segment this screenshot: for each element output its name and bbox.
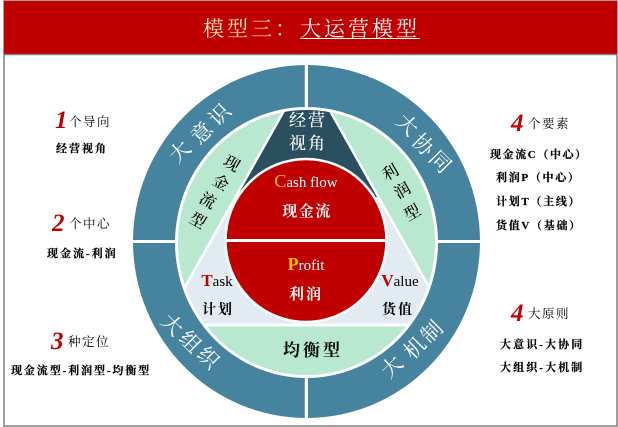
note detail: 现金流型-利润型-均衡型 (11, 363, 151, 377)
label: Profit: Profit (288, 254, 325, 274)
ring label: 大协同 (391, 109, 456, 178)
note: 2个中心: 2 (51, 210, 64, 237)
note detail: 现金流-利润 (47, 246, 118, 260)
label: 利润: 利润 (289, 285, 323, 303)
title: 模型三： (203, 17, 299, 41)
ring label: 大意识 (164, 98, 237, 168)
label: 均衡型: 均衡型 (283, 341, 343, 360)
center circle (225, 159, 387, 322)
ring label: 大组织 (156, 309, 225, 375)
label: Cash flow: Cash flow (274, 171, 338, 191)
label: 经营: 经营 (289, 111, 327, 130)
ring label: 大机制: 制 (416, 316, 448, 348)
label: 现金流型: 现 (220, 152, 243, 176)
element list: 利润P（中心） (496, 170, 581, 184)
label: 利润型: 润 (391, 179, 414, 203)
principle list (500, 337, 584, 374)
title banner (4, 1, 617, 54)
note: 4个要素: 4 (510, 110, 524, 137)
label: Task: Task (201, 271, 233, 290)
top dark segment (238, 110, 377, 197)
ring label: 大组织: 组 (174, 326, 206, 358)
note: 3种定位 (11, 328, 151, 377)
note: 4个要素: 个要素 (528, 116, 570, 131)
triangle lower zone (186, 197, 428, 324)
ring label: 大机制: 大 (376, 351, 408, 383)
element list: 货值V（基础） (496, 218, 582, 232)
note detail: 经营视角 (56, 141, 108, 155)
label: 现金流: 现金流 (282, 202, 332, 220)
note: 4大原则 (500, 300, 584, 374)
note: 4个要素 (490, 110, 588, 232)
label: 现金流型: 流 (196, 189, 219, 213)
label: 计划: 计划 (202, 301, 234, 318)
label: 货值: 货值 (382, 301, 414, 318)
ring label: 大意识: 意 (186, 117, 218, 149)
ring label: 大协同: 协 (407, 129, 440, 162)
element list: 现金流C（中心） (490, 147, 588, 161)
note: 3种定位: 种定位 (68, 335, 110, 349)
ring label: 大组织: 织 (192, 342, 225, 375)
ring label: 大机制 (376, 316, 448, 383)
label: 视角: 视角 (289, 134, 327, 153)
note: 3种定位: 3 (50, 328, 64, 355)
label: 现金流型 (186, 152, 243, 233)
title underlined part: 大运营模型 (300, 17, 420, 41)
label: 利润型 (379, 161, 424, 225)
note: 4大原则: 大原则 (528, 306, 570, 321)
note: 2个中心: 个中心 (69, 216, 111, 231)
element list (490, 147, 588, 232)
label: 利润型: 型 (401, 201, 424, 225)
element list: 计划T（主线） (496, 194, 581, 208)
ring label: 大组织: 大 (156, 309, 188, 341)
inner disc (170, 100, 445, 380)
label: Value: Value (381, 271, 419, 290)
note: 1个导向: 个导向 (69, 115, 111, 129)
ring label: 大意识: 识 (204, 98, 237, 131)
label: 现金流型: 金 (209, 171, 232, 195)
note: 4大原则: 4 (510, 300, 524, 327)
note: 2个中心 (47, 210, 118, 260)
outer ring (128, 60, 485, 422)
principle list: 大意识-大协同 (500, 337, 584, 351)
ring label: 大协同: 大 (391, 109, 423, 141)
ring label: 大意识: 大 (164, 136, 196, 168)
principle list: 大组织-大机制 (500, 360, 584, 374)
note: 1个导向 (55, 107, 111, 155)
ring label: 大机制: 机 (399, 332, 431, 364)
label: 利润型: 利 (379, 161, 402, 185)
ring label: 大协同: 同 (424, 146, 456, 178)
label: 现金流型: 型 (186, 209, 209, 233)
note: 1个导向: 1 (55, 107, 68, 134)
